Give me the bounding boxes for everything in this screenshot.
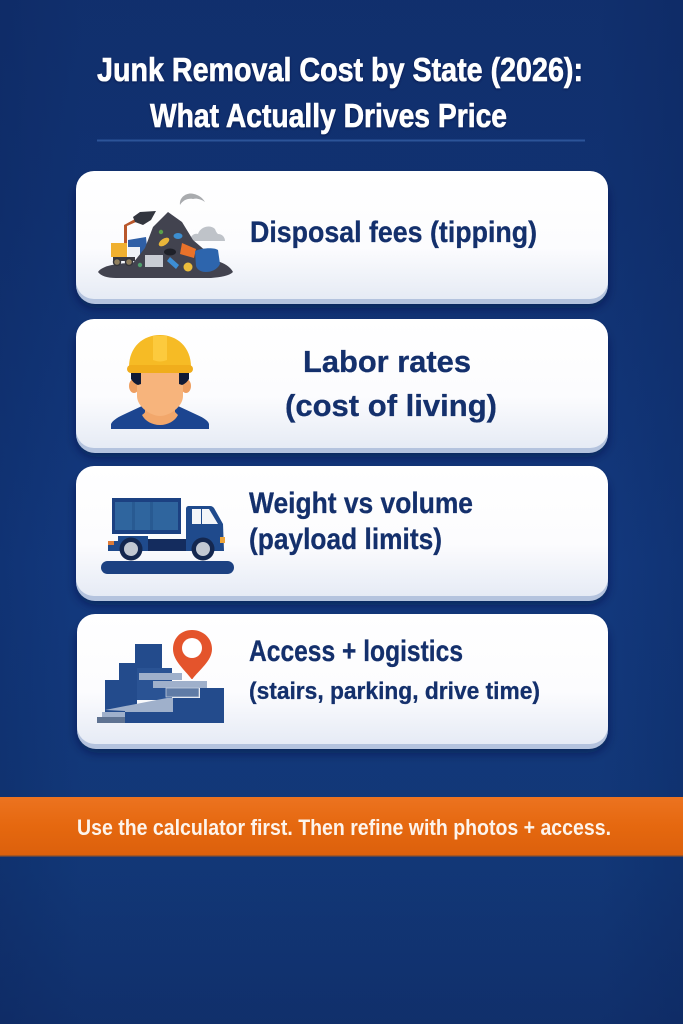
label: weight vs volume: (payload limits) xyxy=(249,523,442,556)
icon: stairs with location pin xyxy=(97,630,224,723)
callout banner xyxy=(0,797,683,856)
label: access and logistics xyxy=(249,635,540,705)
label: labor rates xyxy=(285,344,497,423)
callout banner: Use the calculator first. Then refine with photos + access. xyxy=(77,815,611,840)
title: What Actually Drives Price xyxy=(150,97,507,134)
icon: junk pile xyxy=(98,194,233,278)
panel: labor rates xyxy=(76,319,608,453)
title: Junk Removal Cost by State (2026): xyxy=(97,51,583,88)
icon: worker with hard hat xyxy=(111,335,209,429)
icon: dump truck xyxy=(101,498,234,574)
label: weight vs volume: Weight vs volume xyxy=(249,487,473,520)
label: access and logistics: Access + logistics xyxy=(249,635,463,668)
title xyxy=(97,51,583,134)
label: weight vs volume xyxy=(249,487,473,556)
panel: access and logistics xyxy=(77,614,608,749)
label: labor rates: (cost of living) xyxy=(285,388,497,423)
label: access and logistics: (stairs, parking, drive time) xyxy=(249,678,540,705)
label: disposal fees: Disposal fees (tipping) xyxy=(250,216,537,249)
panel: disposal fees xyxy=(76,171,608,304)
label: labor rates: Labor rates xyxy=(303,344,471,379)
panel: weight vs volume xyxy=(76,466,608,601)
